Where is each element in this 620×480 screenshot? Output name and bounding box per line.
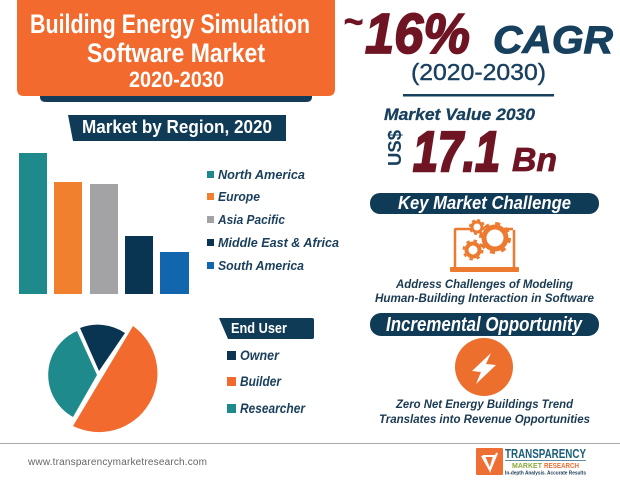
text: challenge description: [375, 277, 594, 305]
text: challenge description: Address Challenges of Modeling: [395, 277, 574, 291]
stat: CAGR: CAGR: [493, 19, 613, 62]
footer rule: [0, 443, 620, 444]
stat: CAGR: (2020-2030): [411, 59, 546, 85]
heading: incremental opportunity: Incremental Opportunity: [386, 314, 583, 336]
stat: market value 2030: 17.1: [413, 120, 500, 184]
pie chart: end user: [48, 325, 157, 432]
heading: market by region: Market by Region, 2020: [82, 117, 272, 137]
icon: laptop with gears: [450, 220, 519, 272]
stat: market value 2030: Bn: [512, 141, 557, 178]
text: challenge description: Human-Building Interaction in Software: [375, 291, 594, 305]
stat: CAGR: [343, 0, 613, 85]
logo: transparency market research: RESEARCH: [544, 463, 579, 470]
text: opportunity description: Translates into Revenue Opportunities: [379, 412, 590, 426]
logo: transparency market research: MARKET: [512, 463, 543, 470]
title banner: Software Market: [87, 38, 265, 68]
heading: end user: End User: [231, 320, 287, 337]
title banner: Building Energy Simulation: [30, 9, 310, 39]
stat: market value 2030: Market Value 2030: [384, 105, 536, 124]
stat: market value 2030: [384, 105, 557, 184]
legend: regions: Asia Pacific: [217, 212, 286, 227]
heading: key market challenge: Key Market Challenge: [398, 193, 571, 213]
legend: regions: Middle East & Africa: [218, 235, 339, 250]
text: opportunity description: [379, 397, 590, 426]
stat: market value 2030: US$: [385, 130, 405, 166]
legend: regions: [207, 167, 339, 273]
legend: end user: [227, 347, 306, 416]
logo: transparency market research: TRANSPARENCY: [505, 446, 586, 461]
website url: www.transparencymarketresearch.com: [27, 457, 207, 468]
title banner: [17, 0, 335, 102]
legend: regions: Europe: [218, 189, 260, 204]
icon: lightning bolt: [455, 338, 513, 396]
heading: end user: [219, 318, 314, 339]
stat: CAGR: 16%: [365, 2, 470, 66]
legend: end user: Owner: [240, 347, 280, 363]
bar chart: market by region: [19, 153, 189, 294]
stat: CAGR: ~: [343, 0, 363, 44]
logo: transparency market research: In-depth Analysis. Accurate Results: [505, 470, 586, 476]
legend: regions: North America: [218, 167, 305, 182]
text: opportunity description: Zero Net Energy Buildings Trend: [395, 397, 574, 411]
legend: end user: Researcher: [240, 400, 306, 416]
divider: [403, 94, 554, 96]
legend: regions: South America: [218, 258, 304, 273]
logo: transparency market research: [476, 446, 586, 476]
legend: end user: Builder: [240, 373, 282, 389]
title banner: 2020-2030: [129, 67, 224, 92]
